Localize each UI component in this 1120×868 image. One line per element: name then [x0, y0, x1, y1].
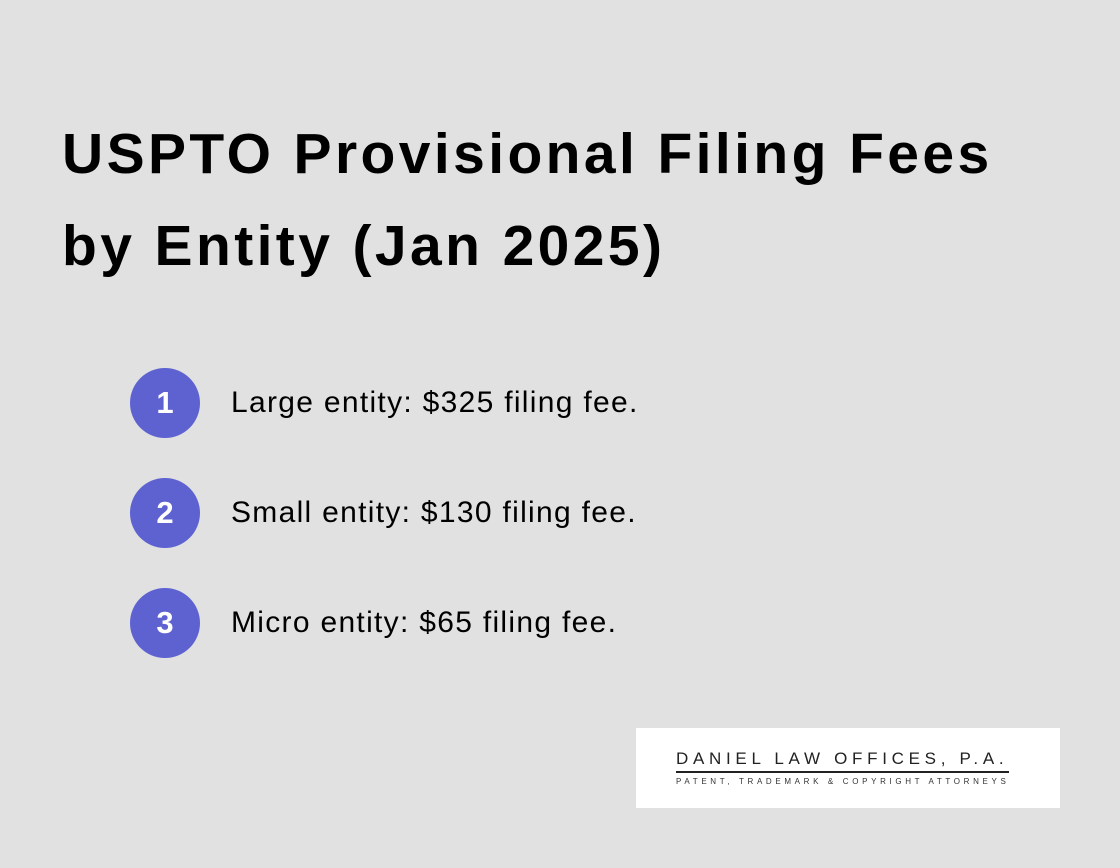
icon: number 2: 2 [156, 495, 174, 530]
text: small entity: Small entity: $130 filing fee. [231, 496, 637, 529]
item 3 [130, 588, 617, 658]
icon: number 2 [130, 478, 200, 548]
text: large entity: Large entity: $325 filing fee. [231, 386, 639, 419]
logo tagline: PATENT, TRADEMARK & COPYRIGHT ATTORNEYS [676, 777, 1010, 786]
text: micro entity: Micro entity: $65 filing fee. [231, 606, 617, 639]
icon: number 1: 1 [156, 385, 174, 420]
title [62, 122, 993, 278]
icon: number 3 [130, 588, 200, 658]
logo name: DANIEL LAW OFFICES, P.A. [676, 749, 1008, 768]
icon: number 3: 3 [156, 605, 174, 640]
title: by Entity (Jan 2025) [62, 214, 665, 278]
item 2 [130, 478, 637, 548]
logo [636, 728, 1060, 808]
icon: number 1 [130, 368, 200, 438]
title: USPTO Provisional Filing Fees [62, 122, 993, 186]
item 1 [130, 368, 639, 438]
